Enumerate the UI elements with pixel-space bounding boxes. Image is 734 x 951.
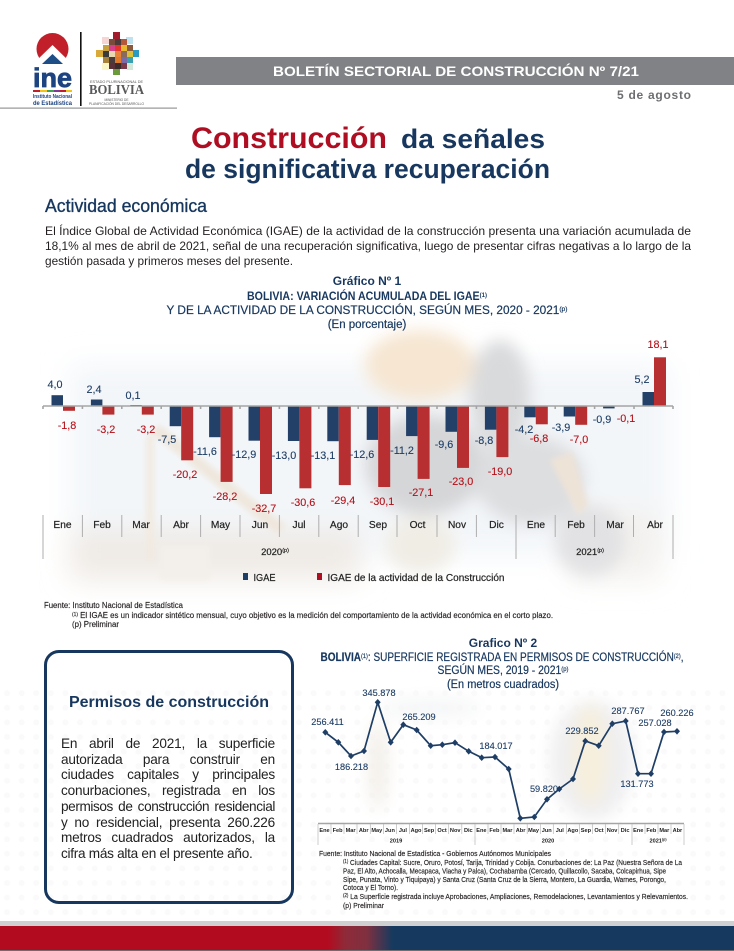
IGAE labels: -11,6 bbox=[193, 446, 217, 458]
month axis: Ene bbox=[319, 828, 330, 834]
month axis: Ene bbox=[53, 520, 72, 531]
IGAE labels: -7,5 bbox=[158, 434, 176, 446]
chart 1 notes: El IGAE es un indicador sintético mensual, cuyo objetivo es la medición del comportamiento de la actividad económica en el corto plazo. bbox=[78, 611, 553, 620]
month axis: Nov bbox=[448, 520, 467, 531]
line labels: 256.411 bbox=[311, 717, 344, 727]
month axis: Dic bbox=[464, 828, 473, 834]
panel text: autorizada para construir en bbox=[61, 752, 275, 767]
IGAE labels: -9,6 bbox=[435, 439, 453, 451]
month axis: Ene bbox=[633, 828, 643, 834]
month axis: Ago bbox=[567, 828, 579, 834]
construction labels: 18,1 bbox=[647, 339, 669, 351]
construction labels: -7,0 bbox=[570, 434, 588, 446]
month axis: Jul bbox=[399, 828, 407, 834]
panel text: metros cuadrados autorizados, la bbox=[61, 830, 275, 845]
icon: INE mountain bbox=[33, 33, 72, 68]
logo: INE: ine bbox=[33, 63, 72, 93]
series: construction bars bbox=[63, 357, 666, 494]
month axis: Feb bbox=[333, 828, 343, 834]
construction labels: -30,6 bbox=[291, 497, 315, 509]
chart 2 notes: (p) Preliminar bbox=[343, 901, 384, 910]
chart 1 title: Y DE LA ACTIVIDAD DE LA CONSTRUCCIÓN, SEGÚN MES, 2020 - 2021 bbox=[166, 305, 550, 317]
month axis: Feb bbox=[646, 828, 657, 834]
construction labels: -3,2 bbox=[97, 424, 115, 436]
month axis: Abr bbox=[173, 520, 190, 531]
chart 2 notes: Ciudades Capital: Sucre, Oruro, Potosí, Tarija, Trinidad y Cobija. Conurbaciones de: La Paz (Nuestra Señora de La bbox=[348, 858, 683, 867]
month axis: 2019 bbox=[390, 838, 402, 844]
legend: IGAE bbox=[254, 572, 276, 584]
line labels: 287.767 bbox=[611, 706, 645, 716]
chart 2 title: , bbox=[681, 652, 683, 664]
month axis: Abr bbox=[673, 828, 683, 834]
intro paragraph: El Índice Global de Actividad Económica (IGAE) de la actividad de la construcción presenta una variación acumulada de bbox=[45, 223, 691, 238]
panel text: conurbaciones, registrada en los bbox=[61, 783, 275, 798]
line labels bbox=[311, 688, 694, 794]
divider line of logos bbox=[80, 32, 82, 106]
month axis bbox=[43, 515, 673, 559]
panel text: permisos de construcción residencial bbox=[61, 799, 275, 814]
month axis: Dic bbox=[489, 520, 504, 531]
series: IGAE bars bbox=[52, 392, 654, 441]
month axis: Ago bbox=[330, 520, 348, 531]
month axis: Oct bbox=[410, 520, 426, 531]
IGAE labels: 0,1 bbox=[125, 390, 141, 402]
logo: Estado Plurinacional de Bolivia bbox=[89, 32, 145, 106]
construction labels: -6,8 bbox=[530, 433, 548, 445]
chart 1 notes bbox=[44, 601, 553, 629]
month axis: 2020 bbox=[542, 838, 554, 844]
panel text: cifra más alta en el presente año. bbox=[61, 846, 252, 861]
month axis: Mar bbox=[503, 828, 513, 834]
chart 2 notes: Fuente: Instituto Nacional de Estadística - Gobiernos Autónomos Municipales bbox=[319, 849, 551, 858]
month axis: (p) bbox=[282, 548, 289, 554]
construction labels bbox=[58, 339, 669, 515]
intro paragraph: 18,1% al mes de abril de 2021, señal de una recuperación significativa, luego de presentar cifras negativas a lo largo de la bbox=[45, 239, 691, 253]
line chart: superficie registrada bbox=[311, 688, 694, 845]
chart 1 notes: Fuente: Instituto Nacional de Estadística bbox=[44, 601, 184, 610]
chart 2 title: (2) bbox=[674, 653, 681, 660]
title: de significativa recuperación bbox=[185, 154, 550, 184]
chart 2 notes: Paz, El Alto, Achocalla, Mecapaca, Viacha y Palca), Cochabamba (Cercado, Quillacollo, Sacaba, Colcapirhua, Sipe bbox=[343, 866, 666, 876]
logo: INE: de Estadística bbox=[33, 101, 73, 107]
chart 2 title: SEGÚN MES, 2019 - 2021 bbox=[438, 665, 574, 677]
line labels: 184.017 bbox=[479, 741, 513, 751]
heading: actividad economica: Actividad económica bbox=[45, 196, 208, 216]
month axis: Jul bbox=[292, 520, 306, 531]
legend: IGAE de la actividad de la Construcción bbox=[328, 572, 505, 584]
chart 2 title bbox=[320, 636, 683, 691]
chart 2 notes bbox=[319, 849, 688, 910]
chart 1 notes: (1) bbox=[72, 612, 78, 618]
construction labels: -28,2 bbox=[213, 491, 237, 503]
chart 2 notes: (2) bbox=[343, 893, 349, 899]
month axis: Sep bbox=[581, 828, 592, 834]
line labels: 345.878 bbox=[362, 688, 396, 698]
month axis: Feb bbox=[567, 520, 585, 531]
chart 2 title: (p) bbox=[561, 666, 568, 673]
month axis: May bbox=[528, 828, 540, 834]
construction labels: -30,1 bbox=[370, 496, 394, 508]
IGAE labels bbox=[47, 374, 650, 462]
IGAE labels: -8,8 bbox=[475, 435, 493, 447]
month axis: Oct bbox=[594, 828, 604, 834]
chart 2 notes: (1) bbox=[343, 859, 349, 865]
month axis: Nov bbox=[450, 828, 461, 834]
logo: INE: Instituto Nacional bbox=[33, 94, 72, 100]
construction labels: -23,0 bbox=[449, 476, 473, 488]
chart 2 notes: Cotoca y El Torno). bbox=[343, 883, 398, 892]
chart 2 title: (1) bbox=[361, 653, 368, 660]
line labels: 59.820 bbox=[530, 784, 558, 794]
month axis: Abr bbox=[516, 828, 526, 834]
chart 2 notes: Sipe, Punata, Vinto y Tiquipaya) y Santa Cruz (Santa Cruz de la Sierra, Montero, La Guardia, Warnes, Porongo, bbox=[343, 875, 666, 884]
bar chart: IGAE vs construction bbox=[43, 339, 673, 584]
chart 1 notes: (p) Preliminar bbox=[72, 620, 119, 629]
chart 2 title: Grafico Nº 2 bbox=[469, 636, 538, 650]
line labels: 257.028 bbox=[638, 718, 672, 728]
axis bbox=[43, 406, 673, 409]
IGAE labels: -13,1 bbox=[311, 450, 335, 462]
IGAE labels: -11,2 bbox=[390, 445, 414, 457]
construction labels: -32,7 bbox=[252, 503, 276, 515]
chart 1 title: (1) bbox=[480, 292, 487, 299]
title bbox=[185, 122, 550, 184]
month axis: 2021 bbox=[576, 547, 597, 558]
logo: Estado Plurinacional de Bolivia: PLANIFICACIÓN DEL DESARROLLO bbox=[89, 101, 144, 106]
panel text: En abril de 2021, la superficie bbox=[61, 736, 275, 751]
month axis: Ago bbox=[411, 828, 422, 834]
intro paragraph bbox=[45, 223, 691, 268]
month axis: May bbox=[371, 828, 383, 834]
chart 1 title: Gráfico Nº 1 bbox=[333, 274, 402, 288]
month axis: Feb bbox=[93, 520, 111, 531]
month axis: Mar bbox=[606, 520, 624, 531]
IGAE labels: -13,0 bbox=[272, 450, 296, 462]
chart 1 title: (En porcentaje) bbox=[328, 319, 406, 331]
chart 1 title: (p) bbox=[559, 306, 567, 313]
line labels: 186.218 bbox=[335, 762, 368, 772]
IGAE labels: 2,4 bbox=[86, 384, 102, 396]
month axis: 2020 bbox=[261, 547, 282, 558]
panel heading: Permisos de construcción bbox=[69, 694, 269, 711]
IGAE labels: 4,0 bbox=[47, 379, 63, 391]
chart 2 notes: La Superficie registrada incluye Aprobaciones, Ampliaciones, Remodelaciones, Levantamientos y Relevamientos. bbox=[348, 892, 688, 901]
IGAE labels: -3,9 bbox=[552, 422, 570, 434]
line labels: 131.773 bbox=[620, 779, 654, 789]
IGAE labels: -4,2 bbox=[515, 424, 533, 436]
construction labels: -20,2 bbox=[173, 469, 197, 481]
month axis: (p) bbox=[662, 838, 667, 842]
month axis: Ene bbox=[476, 828, 487, 834]
title: Construcción bbox=[191, 122, 387, 155]
IGAE labels: 5,2 bbox=[634, 374, 650, 386]
month axis: Dic bbox=[621, 828, 629, 834]
title: da señales bbox=[401, 124, 545, 154]
icon: emblem bbox=[96, 32, 139, 75]
month axis: Mar bbox=[346, 828, 356, 834]
logo: INE bbox=[33, 33, 73, 107]
logo: Estado Plurinacional de Bolivia: BOLIVIA bbox=[89, 83, 145, 98]
month axis: (p) bbox=[597, 548, 604, 554]
chart 2 title: (En metros cuadrados) bbox=[447, 679, 559, 691]
legend bbox=[243, 572, 505, 584]
month axis: May bbox=[211, 520, 231, 531]
construction labels: -29,4 bbox=[331, 495, 355, 507]
month axis: Jun bbox=[542, 828, 552, 834]
month axis: Abr bbox=[647, 520, 664, 531]
dotted background pattern bbox=[0, 690, 734, 921]
logo: Estado Plurinacional de Bolivia: ESTADO PLURINACIONAL DE bbox=[90, 80, 144, 84]
header bar bbox=[176, 57, 734, 85]
background photo: construction worker bbox=[70, 330, 670, 820]
month axis: Mar bbox=[132, 520, 150, 531]
line labels: 265.209 bbox=[402, 712, 436, 722]
construction labels: -27,1 bbox=[409, 487, 433, 499]
header bar: BOLETÍN SECTORIAL DE CONSTRUCCIÓN Nº 7/21 bbox=[273, 62, 639, 79]
month axis: Jul bbox=[556, 828, 564, 834]
chart 1 title: BOLIVIA: VARIACIÓN ACUMULADA DEL IGAE bbox=[247, 291, 499, 303]
month axis: Feb bbox=[489, 828, 500, 834]
panel text: y no residencial, presenta 260.226 bbox=[61, 815, 275, 830]
chart 2 title: BOLIVIA bbox=[320, 652, 361, 664]
panel text: ciudades capitales y principales bbox=[61, 767, 275, 782]
IGAE labels: -12,6 bbox=[350, 449, 374, 461]
logo: Estado Plurinacional de Bolivia: MINISTERIO DE bbox=[104, 98, 129, 102]
month axis: Sep bbox=[424, 828, 435, 834]
chart 2 title: : SUPERFICIE REGISTRADA EN PERMISOS DE CONSTRUCCIÓN bbox=[368, 651, 674, 664]
intro paragraph: gestión pasada y primeros meses del presente. bbox=[45, 254, 293, 268]
date: 5 de agosto bbox=[617, 88, 691, 102]
month axis: Oct bbox=[437, 828, 447, 834]
month axis: Jun bbox=[252, 520, 268, 531]
month axis: Ene bbox=[527, 520, 545, 531]
month axis: Sep bbox=[369, 520, 387, 531]
IGAE labels: -0,9 bbox=[593, 414, 611, 426]
IGAE labels: -12,9 bbox=[232, 449, 256, 461]
construction labels: -1,8 bbox=[58, 420, 76, 432]
month axis: Nov bbox=[607, 828, 618, 834]
month axis: Jun bbox=[385, 828, 395, 834]
line labels: 229.852 bbox=[565, 726, 599, 736]
construction labels: -19,0 bbox=[488, 466, 512, 478]
month axis bbox=[318, 824, 684, 845]
panel text bbox=[61, 736, 276, 861]
month axis: Mar bbox=[659, 828, 670, 834]
header rule bbox=[0, 108, 177, 109]
month axis: Abr bbox=[359, 828, 369, 834]
month axis: 2021 bbox=[649, 838, 662, 844]
line labels: 260.226 bbox=[660, 708, 694, 718]
panel: permisos de construccion bbox=[44, 650, 294, 904]
chart 1 title bbox=[166, 274, 567, 331]
construction labels: -0,1 bbox=[617, 413, 635, 425]
construction labels: -3,2 bbox=[137, 424, 155, 436]
footer band bbox=[0, 921, 734, 951]
line markers bbox=[322, 699, 680, 822]
